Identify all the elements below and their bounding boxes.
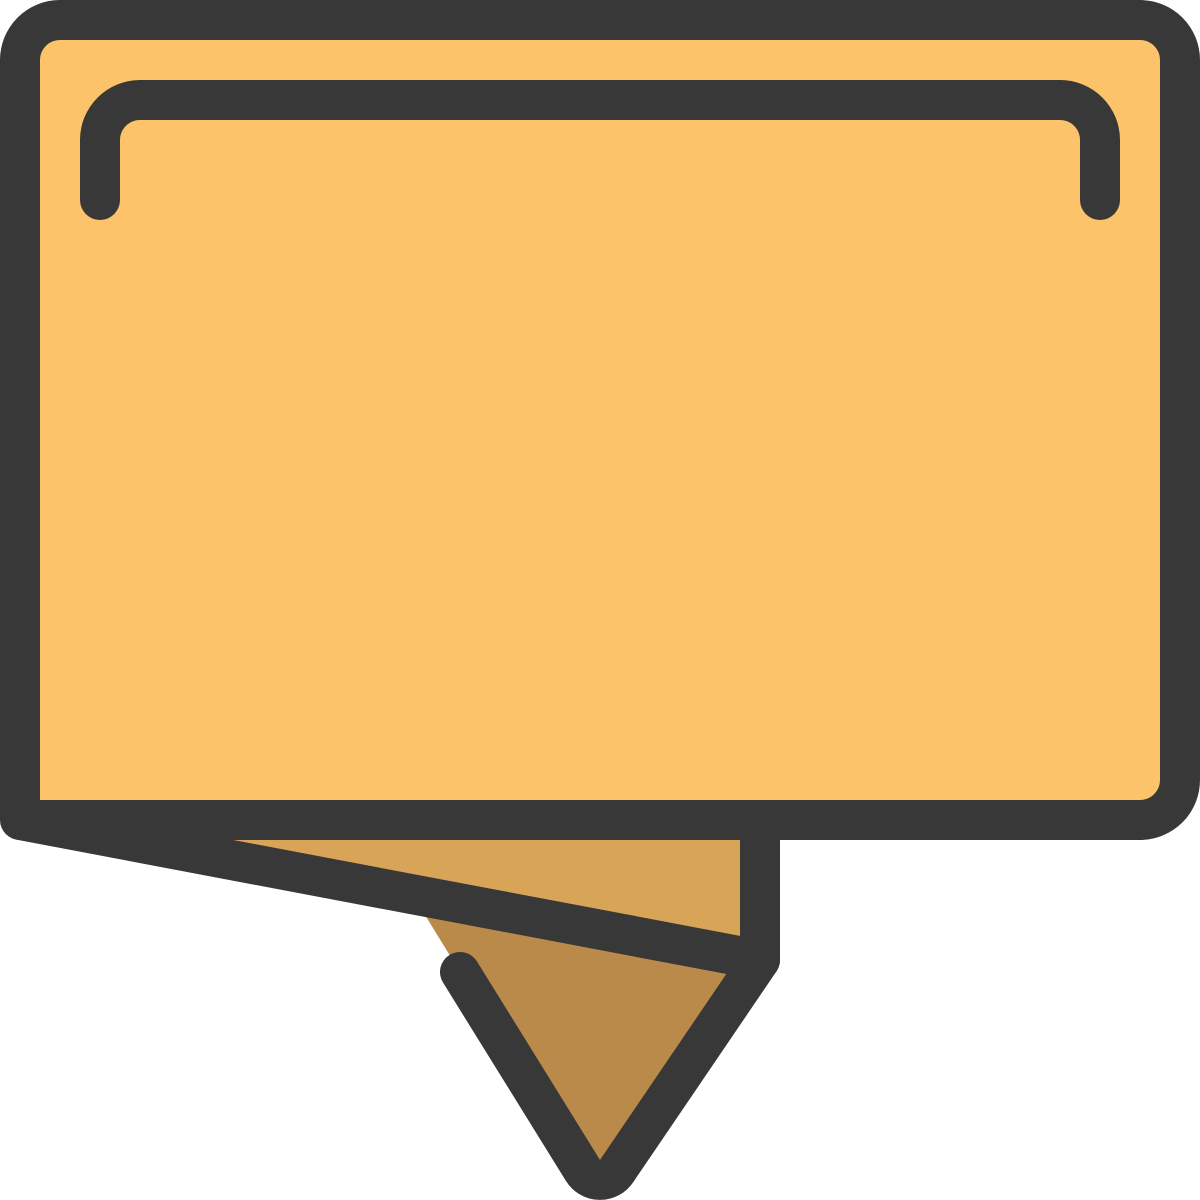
fold fill — [232, 836, 744, 955]
lower tip fill — [425, 915, 760, 1175]
main panel — [20, 20, 1180, 820]
inner highlight bracket — [100, 100, 1100, 200]
diagonal fold line and right edge — [20, 820, 760, 960]
tip outline — [460, 960, 760, 1180]
